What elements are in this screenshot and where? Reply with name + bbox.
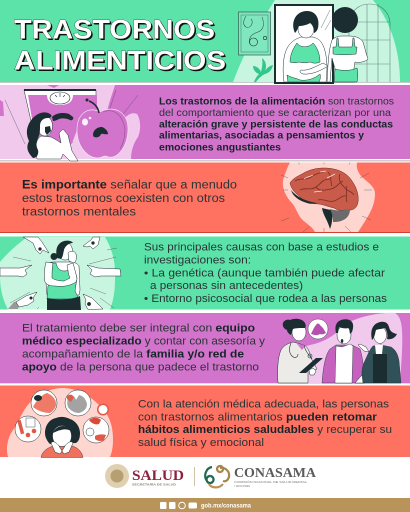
hand: bottom right bbox=[83, 294, 103, 310]
text: recovery: Con la atención médica adecuada, las personas bbox=[138, 399, 390, 411]
icon: wall art frame bbox=[238, 12, 270, 55]
title: TRASTORNOS bbox=[14, 14, 215, 44]
icon: speech bubble with food bbox=[308, 319, 328, 339]
icon: thought bubble bbox=[97, 404, 109, 416]
text: definition bbox=[159, 96, 394, 153]
text: comorbidity: trastornos mentales bbox=[22, 206, 136, 218]
footer logos bbox=[105, 464, 317, 488]
panel: treatment bbox=[0, 313, 410, 383]
rays bbox=[5, 90, 138, 144]
icon: worried woman with worm bbox=[27, 112, 78, 161]
text: definition: emociones angustiantes bbox=[159, 142, 281, 153]
icon: food plates bbox=[15, 390, 109, 443]
title: ALIMENTICIOS bbox=[14, 46, 226, 76]
hand: left bbox=[0, 265, 32, 277]
icons: social media bbox=[160, 502, 197, 509]
title: TRASTORNOS bbox=[16, 16, 216, 46]
text: definition: del comportamiento que se caracterizan por una bbox=[159, 108, 391, 119]
illustration background blob bbox=[280, 313, 402, 383]
plate: croissant bbox=[31, 390, 57, 416]
text: causes: • Entorno psicosocial que rodea a las personas bbox=[144, 293, 388, 305]
icon: mirror with reflected woman bbox=[275, 5, 333, 83]
text: recovery bbox=[138, 399, 392, 449]
panel: recovery bbox=[0, 386, 410, 458]
logo: Conasama: CONASAMA bbox=[234, 466, 317, 481]
icon: arch window bbox=[349, 4, 390, 82]
panel: causes bbox=[0, 234, 410, 310]
text: causes: a personas sin antecedentes) bbox=[150, 280, 303, 292]
text: treatment: apoyo de la persona que padece el trastorno bbox=[22, 361, 259, 373]
plate: fish bbox=[65, 390, 91, 416]
illustration background blob bbox=[233, 0, 400, 82]
logo: Salud: SECRETARÍA DE SALUD bbox=[132, 482, 177, 486]
hand: top right bbox=[83, 237, 100, 249]
icon: plant bbox=[253, 58, 273, 82]
text: causes: investigaciones son: bbox=[144, 254, 251, 266]
title bbox=[14, 14, 228, 77]
rays bbox=[281, 162, 372, 232]
text: website: gob.mx/conasama bbox=[201, 504, 252, 510]
icon: woman in teal jacket bbox=[358, 322, 401, 383]
panel: header bbox=[0, 0, 410, 83]
illustration background blob bbox=[0, 237, 115, 310]
hand: bottom left bbox=[8, 292, 37, 309]
text: recovery: con trastornos alimentarios pueden retomar bbox=[138, 411, 378, 423]
text: comorbidity: estos trastornos coexisten con otros bbox=[22, 193, 225, 205]
text: definition: alimentarias, asociadas a pensamientos y bbox=[159, 131, 364, 142]
panel: definition bbox=[0, 85, 410, 161]
illustration background blob bbox=[0, 85, 140, 159]
text: definition: alteración grave y persistente de las conductas bbox=[159, 119, 393, 130]
panel: comorbidity bbox=[0, 162, 410, 233]
logo: Conasama: Y ADICCIONES bbox=[234, 484, 250, 488]
icon: smiling woman bbox=[41, 417, 83, 458]
text: causes: Sus principales causas con base a estudios e bbox=[144, 242, 379, 254]
text: recovery: hábitos alimenticios saludables y recuperar su bbox=[138, 424, 392, 436]
text: causes: • La genética (aunque también puede afectar bbox=[144, 268, 385, 280]
text: definition: Los trastornos de la alimentación son trastornos bbox=[159, 96, 394, 107]
footer bar bbox=[0, 498, 410, 512]
text: comorbidity bbox=[22, 179, 237, 218]
text: treatment bbox=[22, 323, 266, 373]
illustration background blob bbox=[283, 162, 375, 232]
logo: Salud bbox=[105, 464, 184, 488]
title: ALIMENTICIOS bbox=[16, 47, 228, 77]
logo: Salud: SALUD bbox=[132, 468, 184, 484]
icon: brain bbox=[290, 168, 358, 229]
icon: man bbox=[322, 319, 366, 383]
text: recovery: salud física y emocional bbox=[138, 437, 264, 449]
icon: woman covering face bbox=[44, 241, 81, 310]
hand: right bbox=[87, 265, 121, 277]
logo: Conasama bbox=[205, 466, 317, 488]
icon: woman from behind bbox=[327, 7, 368, 82]
text: treatment: médico especializado y contar con asesoría y bbox=[22, 336, 266, 348]
plate: salad bbox=[83, 417, 109, 443]
icon: bathroom scale bbox=[24, 89, 97, 143]
text: treatment: acompañamiento de la familia y/o red de bbox=[22, 348, 244, 360]
text: comorbidity: Es importante señalar que a menudo bbox=[22, 179, 237, 191]
logo: Conasama: COMISIÓN NACIONAL DE SALUD MENTAL bbox=[234, 479, 308, 484]
text: causes bbox=[144, 242, 388, 305]
rays bbox=[10, 248, 117, 309]
icon: pointing hands bbox=[0, 237, 121, 310]
text: treatment: El tratamiento debe ser integral con equipo bbox=[22, 323, 255, 335]
hand: top left bbox=[23, 237, 49, 254]
illustration background blob bbox=[7, 388, 113, 457]
icon: doctor bbox=[278, 319, 323, 383]
icon: apple with worm bbox=[77, 98, 128, 158]
plate: toast and eggs bbox=[15, 416, 41, 442]
